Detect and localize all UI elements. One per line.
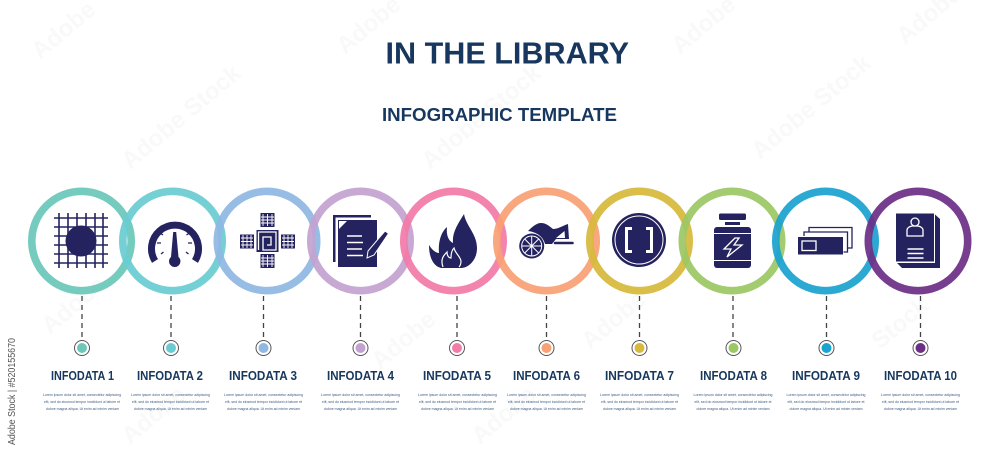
panel: infodata 5: dolore magna aliqua. Ut enim ad minim veniam [421,407,494,411]
panel: infodata 8 [682,191,782,411]
panel: infodata 3: elit, sed do eiusmod tempor incididunt ut labore et [225,400,302,404]
panel: infodata 7: Lorem ipsum dolor sit amet, consectetur adipiscing [600,393,679,397]
icon: gauge [152,224,198,267]
panel: infodata 5: INFODATA 5 [423,369,491,383]
panel: infodata 1: INFODATA 1 [51,369,114,383]
text: Adobe [117,381,191,450]
panel: infodata 4 [311,191,410,411]
icon: profile book [896,214,940,268]
panel: infodata 3: INFODATA 3 [229,369,297,383]
text: Adobe [37,271,111,340]
panel: infodata 7: elit, sed do eiusmod tempor incididunt ut labore et [601,400,678,404]
icon: document and pencil [333,215,388,267]
panel: infodata 10: dolore magna aliqua. Ut enim ad minim veniam [884,407,957,411]
panel: infodata 6: elit, sed do eiusmod tempor incididunt ut labore et [508,400,585,404]
panel: infodata 8: dolore magna aliqua. Ut enim ad minim veniam [696,407,770,411]
icon: energy jar [714,214,751,268]
panel: infodata 6: INFODATA 6 [513,369,580,383]
icon: stacked cards [798,228,852,254]
panel: infodata 5: Lorem ipsum dolor sit amet, consectetur adipiscing [418,393,497,397]
panel: infodata 5 [404,191,503,411]
panel: infodata 8: INFODATA 8 [700,369,767,383]
panel: infodata 1: Lorem ipsum dolor sit amet, consectetur adipiscing [43,393,121,397]
panel: infodata 4: elit, sed do eiusmod tempor incididunt ut labore et [322,400,399,404]
panel: infodata 9: dolore magna aliqua. Ut enim ad minim veniam [790,407,862,411]
panel: infodata 2: dolore magna aliqua. Ut enim ad minim veniam [134,407,207,411]
icon: grid with circle [54,213,108,268]
panel: infodata 3: Lorem ipsum dolor sit amet, consectetur adipiscing [224,393,303,397]
panel: infodata 9: INFODATA 9 [792,369,860,383]
panel: infodata 2: Lorem ipsum dolor sit amet, consectetur adipiscing [131,393,210,397]
panel: infodata 5: elit, sed do eiusmod tempor incididunt ut labore et [419,400,496,404]
panel: infodata 2: INFODATA 2 [137,369,203,383]
text: Adobe Stock [747,49,877,165]
panel: infodata 4: dolore magna aliqua. Ut enim ad minim veniam [324,407,397,411]
panel: infodata 2 [123,191,222,411]
subtitle: INFOGRAPHIC TEMPLATE [382,104,617,125]
text: Adobe [467,381,541,450]
title: IN THE LIBRARY [386,36,629,70]
panel: infodata 10: elit, sed do eiusmod tempor incididunt ut labore et [882,400,959,404]
panel: infodata 8: Lorem ipsum dolor sit amet, consectetur adipiscing [694,393,772,397]
icon: tiled cross [240,213,295,268]
icon: flame [429,214,477,268]
icon: wheel vehicle [519,223,572,258]
icon: bracket coin [612,213,666,267]
panel: infodata 1 [32,191,131,411]
panel: infodata 7 [590,191,689,411]
text: Stock [867,291,934,355]
panel: infodata 4: INFODATA 4 [327,369,394,383]
panel: infodata 2: elit, sed do eiusmod tempor incididunt ut labore et [132,400,209,404]
text: Adobe [367,306,441,375]
panel: infodata 6: dolore magna aliqua. Ut enim ad minim veniam [510,407,583,411]
panel: infodata 7: INFODATA 7 [605,369,674,383]
text: Adobe Stock [417,59,547,175]
panel: infodata 10: Lorem ipsum dolor sit amet, consectetur adipiscing [881,393,960,397]
panel: infodata 4: Lorem ipsum dolor sit amet, consectetur adipiscing [321,393,400,397]
text: Adobe Stock [117,59,247,175]
panel: infodata 10: INFODATA 10 [884,369,957,383]
panel: infodata 10 [868,191,968,411]
text: Adobe [577,286,651,355]
panel: infodata 9 [776,191,875,411]
panel: infodata 9: Lorem ipsum dolor sit amet, consectetur adipiscing [786,393,866,397]
panel: infodata 9: elit, sed do eiusmod tempor incididunt ut labore et [788,400,864,404]
panel: infodata 7: dolore magna aliqua. Ut enim ad minim veniam [603,407,676,411]
panel: infodata 1: elit, sed do eiusmod tempor incididunt ut labore et [44,400,120,404]
panel: infodata 3: dolore magna aliqua. Ut enim ad minim veniam [227,407,300,411]
panel: infodata 6: Lorem ipsum dolor sit amet, consectetur adipiscing [507,393,586,397]
panel: infodata 6 [497,191,596,411]
stock credit: Adobe Stock | #520155670 [7,338,18,445]
panel: infodata 8: elit, sed do eiusmod tempor incididunt ut labore et [694,400,772,404]
panel: infodata 1: dolore magna aliqua. Ut enim ad minim veniam [46,407,119,411]
panel: infodata 3 [217,191,317,411]
